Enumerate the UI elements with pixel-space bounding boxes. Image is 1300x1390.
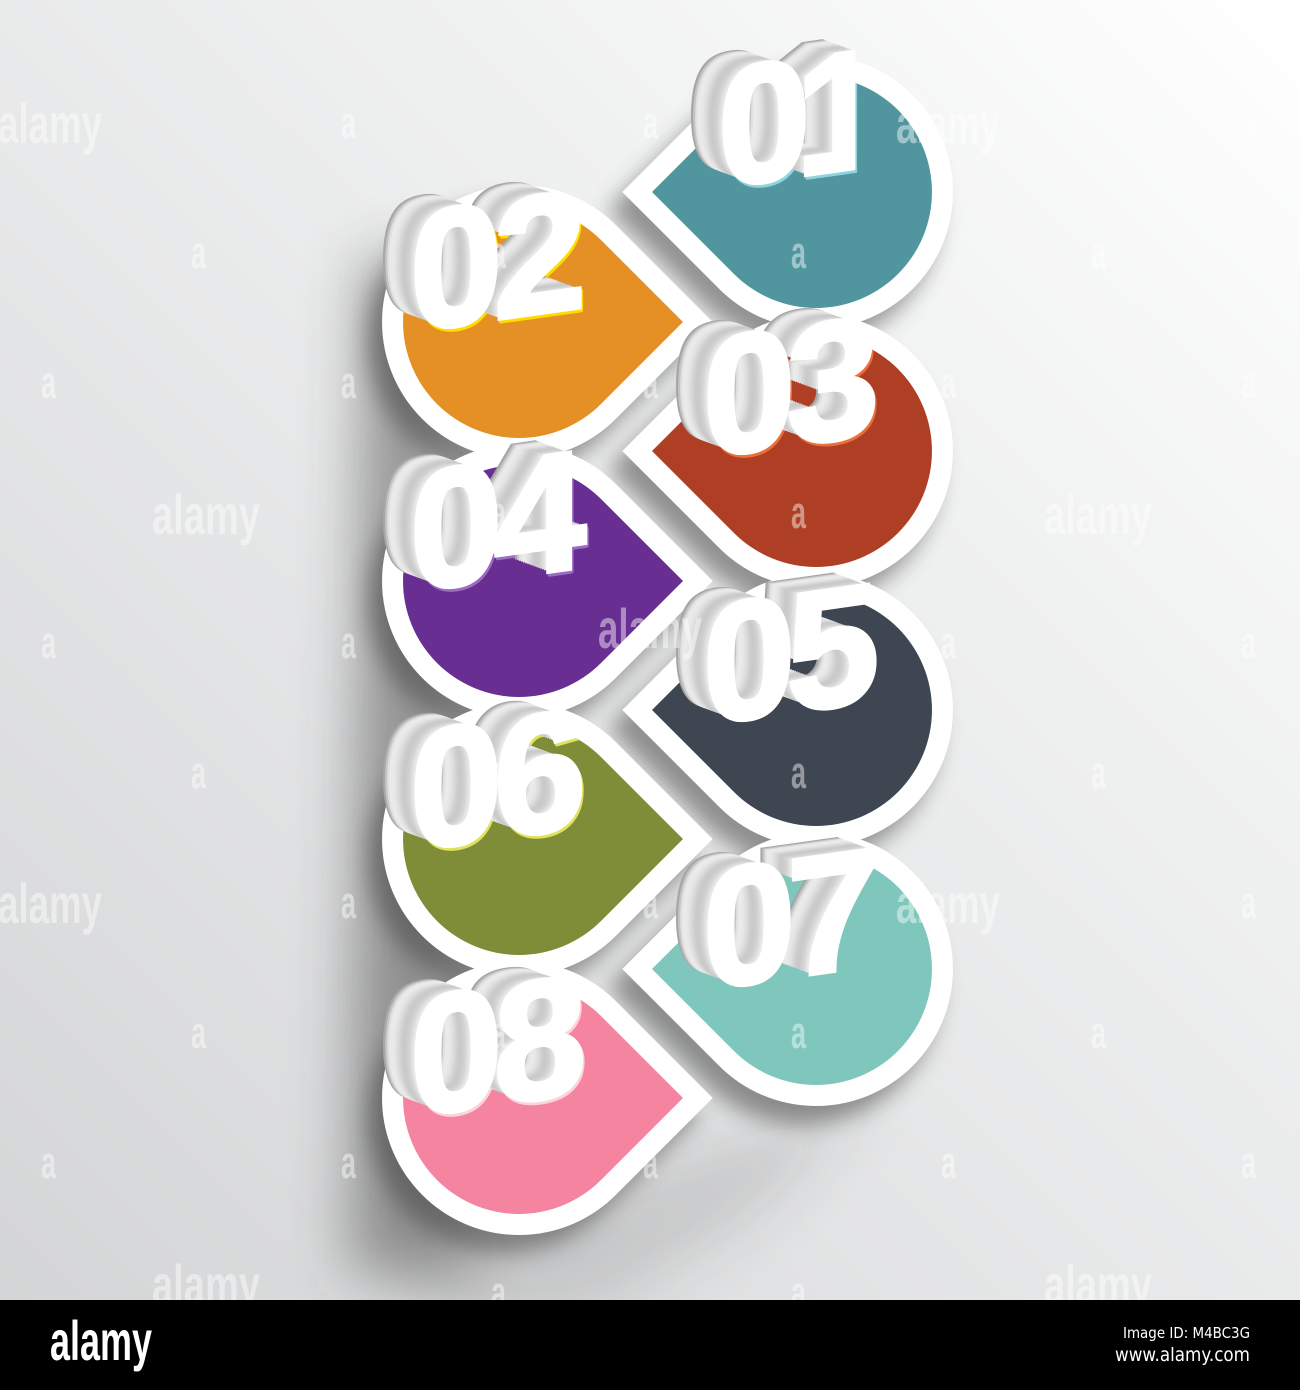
number glow outlines [412, 14, 885, 1155]
number glow outlines: 06 [412, 676, 582, 889]
panel: teardrop 04 purple [403, 465, 683, 697]
number 05: 05 [703, 549, 871, 761]
panel: teardrop 02 orange [403, 206, 683, 438]
contact shadows [389, 94, 918, 1232]
watermark layer: a [41, 1137, 57, 1188]
number glow outlines: 02 [412, 157, 581, 370]
watermark layer: a [341, 617, 357, 668]
watermark layer: a [1241, 357, 1257, 408]
watermark layer: alamy [152, 483, 260, 546]
number 06: 06 [410, 675, 578, 887]
number 02: 02 [410, 156, 578, 368]
watermark layer: a [791, 1007, 807, 1058]
watermark layer: a [941, 1137, 957, 1188]
watermark layer: a [643, 877, 659, 928]
panel: teardrop 03 red [652, 335, 932, 567]
watermark layer: alamy [1044, 483, 1152, 546]
number 08: 08 [410, 941, 578, 1153]
watermark layer: a [1241, 97, 1257, 148]
watermark layer: a [341, 877, 357, 928]
watermark layer: a [643, 1137, 659, 1188]
watermark layer: alamy [152, 1253, 260, 1316]
watermark layer: a [491, 1007, 507, 1058]
watermark layer: a [791, 1267, 807, 1318]
watermark layer: a [341, 357, 357, 408]
watermark layer: alamy [1044, 1253, 1152, 1316]
number 07: 07 [703, 814, 871, 1026]
panel: teardrop 06 olive [403, 723, 683, 955]
watermark layer: a [1241, 877, 1257, 928]
watermark layer: alamy [0, 872, 102, 935]
panel: teardrop 05 dark slate [652, 594, 932, 826]
watermark layer: a [341, 97, 357, 148]
number glow outlines: 08 [412, 942, 583, 1155]
watermark layer: a [1091, 227, 1107, 278]
watermark layer: a [1241, 617, 1257, 668]
watermark layer: a [791, 487, 807, 538]
watermark layer: alamy [0, 92, 102, 155]
watermark layer: alamy [896, 872, 1000, 935]
watermark layer: a [341, 1137, 357, 1188]
number glow outlines: 04 [412, 417, 587, 630]
number glow outlines: 01 [720, 14, 885, 226]
watermark layer: a [41, 617, 57, 668]
panel: teardrop 01 teal [652, 76, 932, 308]
watermark layer: a [1241, 1137, 1257, 1188]
number glow outlines: 03 [704, 283, 875, 496]
image id: Image ID: M4BC3G [1123, 1324, 1250, 1342]
watermark layer: alamy [896, 92, 1000, 155]
number 01: 01 [718, 14, 873, 224]
footer logo: alamy [50, 1309, 152, 1372]
watermark layer: a [1091, 1007, 1107, 1058]
soft column shadow [350, 260, 880, 1320]
website: www.alamy.com [1115, 1344, 1250, 1366]
footer bar [0, 1300, 1300, 1390]
watermark layer: a [941, 617, 957, 668]
watermark layer: a [491, 747, 507, 798]
watermark layer: a [41, 357, 57, 408]
panel: teardrop 07 mint [652, 853, 932, 1085]
number 04: 04 [410, 416, 578, 628]
watermark layer: a [491, 487, 507, 538]
watermark layer: a [791, 227, 807, 278]
watermark layer: a [643, 357, 659, 408]
watermark layer: a [1091, 747, 1107, 798]
watermark layer: a [491, 1267, 507, 1318]
watermark layer: a [191, 747, 207, 798]
watermark layer: alamy [598, 597, 702, 660]
watermark layer: a [491, 227, 507, 278]
watermark layer: a [191, 227, 207, 278]
number 03: 03 [703, 282, 871, 494]
watermark layer: a [191, 1007, 207, 1058]
watermark layer: a [941, 357, 957, 408]
panel: teardrop 08 pink [403, 982, 683, 1214]
watermark layer: a [791, 747, 807, 798]
watermark layer: a [643, 97, 659, 148]
